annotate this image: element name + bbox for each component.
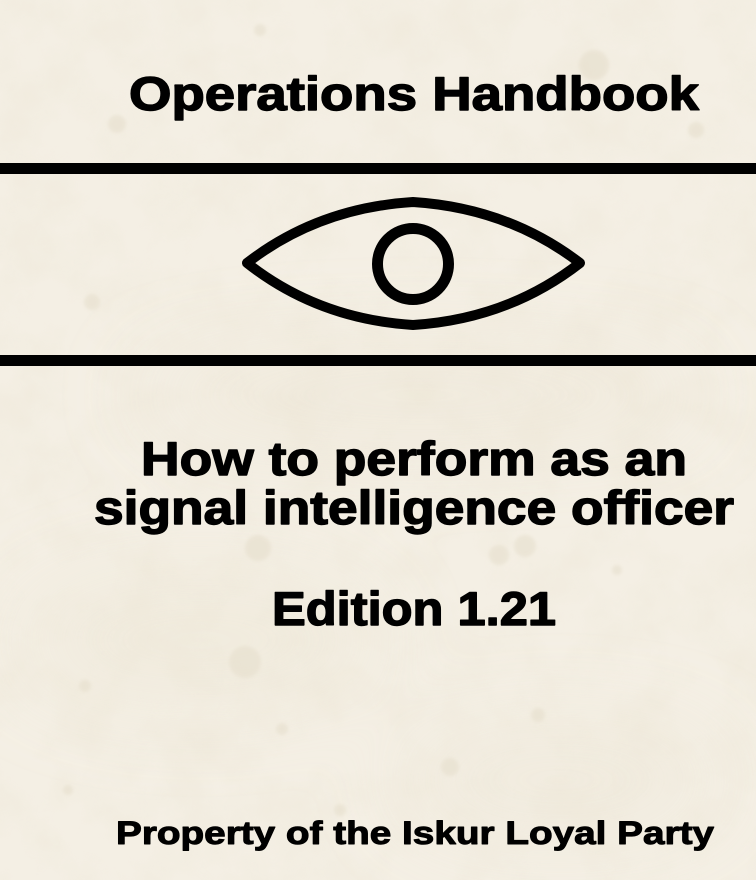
subtitle: signal intelligence officer [94,481,734,534]
edition label: Edition 1.21 [272,582,556,635]
top divider bar [0,163,756,174]
subtitle [94,432,734,534]
subtitle: How to perform as an [141,432,687,485]
bottom divider bar [0,355,756,366]
title: Operations Handbook [129,67,700,120]
ownership footer: Property of the Iskur Loyal Party [116,815,714,851]
icon: eye [247,202,580,325]
